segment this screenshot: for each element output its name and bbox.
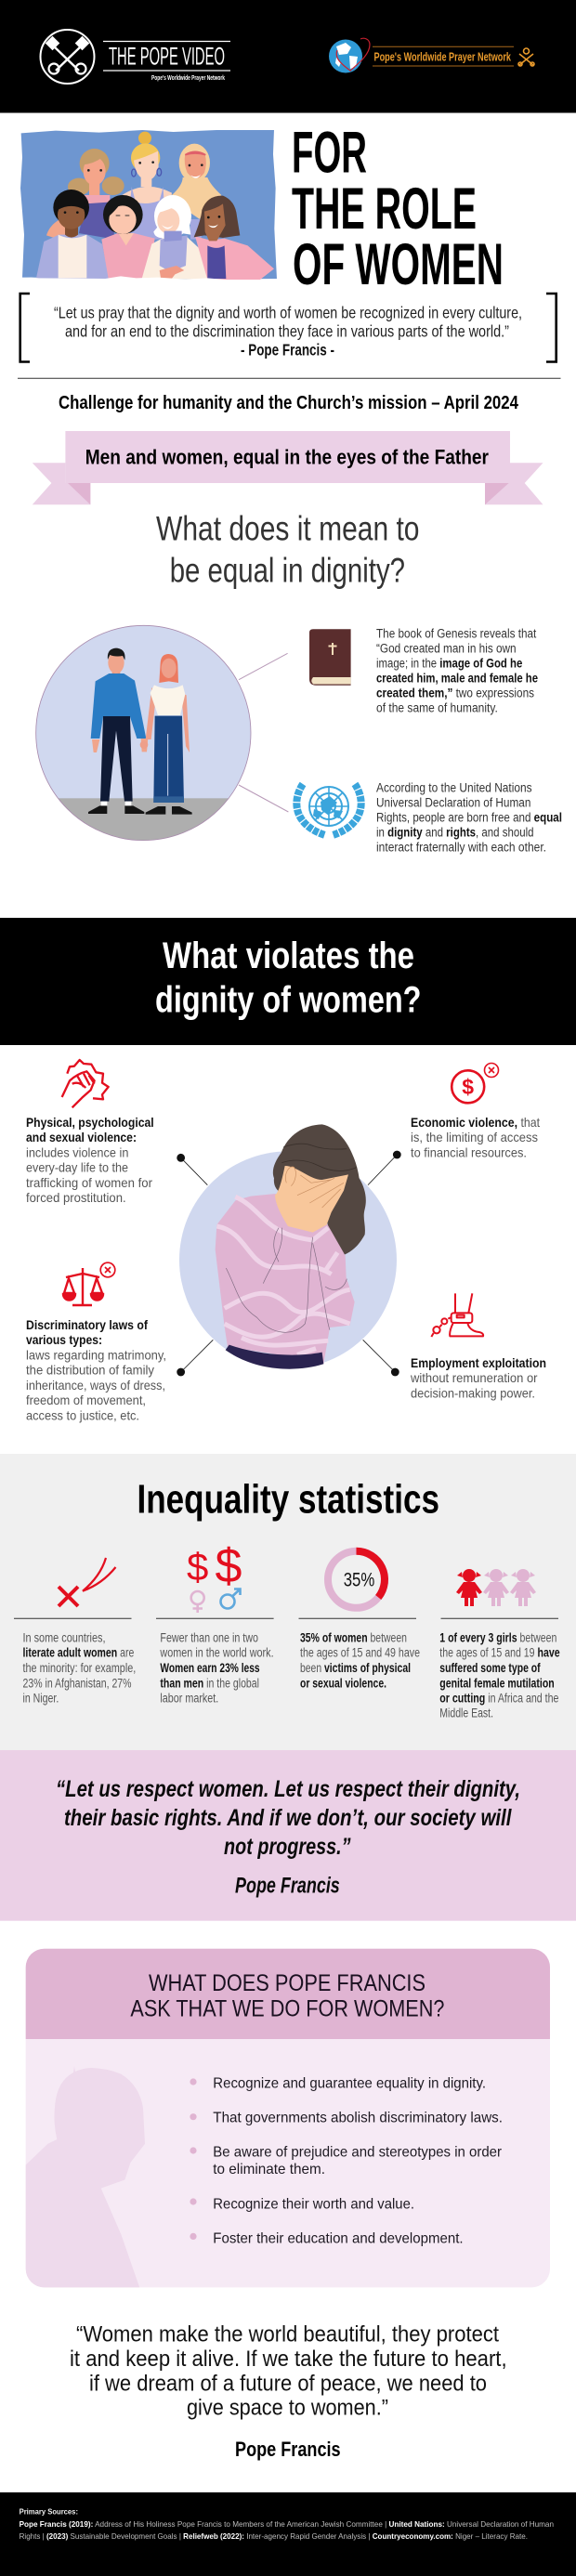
woman with hijab — [172, 144, 221, 240]
panel: pink quote: not progress.” — [224, 1834, 351, 1860]
text: violence rate — [300, 1630, 420, 1690]
text: literacy: in Niger. — [22, 1691, 59, 1705]
text: discriminatory laws: laws regarding matrimony, — [26, 1347, 166, 1362]
icon: United Nations emblem — [296, 784, 361, 835]
text: violence rate: 35% of women between — [300, 1630, 407, 1644]
logo: The Pope Video: Pope's Worldwide Prayer Network — [151, 75, 225, 82]
closing quote: Pope Francis — [235, 2438, 341, 2461]
text: physical violence: forced prostitution. — [26, 1190, 126, 1205]
text: discriminatory laws: the distribution of family — [26, 1362, 154, 1377]
man — [88, 648, 148, 814]
footer: sources — [0, 2492, 576, 2576]
logo: The Pope Video: THE POPE VIDEO — [109, 42, 225, 70]
icon: pay gap: $ — [216, 1539, 242, 1593]
text: employment exploitation: without remuneration or — [410, 1370, 538, 1385]
text: Genesis: The book of Genesis reveals that — [376, 627, 537, 641]
text: Genesis: created him, male and female he — [376, 671, 538, 685]
text: literacy: 23% in Afghanistan, 27% — [22, 1676, 132, 1690]
text: Genesis: “God created man in his own — [376, 642, 517, 656]
illustration: crying woman in circle — [177, 1124, 400, 1376]
text: pay gap: women in the world work. — [160, 1646, 274, 1660]
icon: dollar crossed — [452, 1063, 498, 1103]
text: physical violence: every-day life to the — [26, 1160, 128, 1175]
text: economic violence: Economic violence, that — [411, 1115, 540, 1130]
icon: crossed keys — [41, 30, 95, 84]
bullet list: Recognize their worth and value. — [213, 2196, 414, 2212]
text: United Nations: Rights, people are born free and equal — [376, 811, 562, 825]
text: discriminatory laws: freedom of movement, — [26, 1393, 146, 1407]
text: violence rate: or sexual violence. — [300, 1676, 386, 1690]
text: discriminatory laws: various types: — [26, 1332, 102, 1347]
black band: what violates — [0, 918, 576, 1045]
bullets — [190, 2078, 197, 2240]
text: pay gap: Fewer than one in two — [160, 1630, 258, 1644]
connectors — [239, 653, 288, 812]
text: Genesis: image; in the image of God he — [376, 657, 523, 671]
title: FOR — [292, 121, 367, 186]
closing quote: it and keep it alive. If we take the future to heart, — [70, 2347, 507, 2372]
text: physical violence: includes violence in — [26, 1144, 128, 1159]
woman with pigtails — [46, 149, 124, 240]
woman with blond bun — [121, 132, 172, 240]
prayer quote with brackets: - Pope Francis - — [241, 340, 334, 359]
icon: globe and heart — [329, 38, 370, 72]
silhouette of Pope Francis — [26, 2066, 145, 2287]
text: violence rate: been victims of physical — [300, 1661, 411, 1675]
heading: Inequality statistics — [137, 1476, 439, 1522]
woman with brown hair — [194, 196, 274, 280]
footer: sources: Primary Sources: — [20, 2508, 78, 2517]
text: pay gap: than men in the global — [160, 1676, 259, 1690]
woman with white hair — [142, 195, 208, 281]
bullet list: Be aware of prejudice and stereotypes in order — [213, 2144, 503, 2161]
text: literacy: literate adult women are — [22, 1646, 134, 1660]
ribbon banner — [33, 431, 543, 504]
prayer quote with brackets — [20, 294, 556, 362]
text: United Nations: According to the United Nations — [376, 781, 532, 795]
pointer lines — [177, 1151, 400, 1376]
logo: Pope's Worldwide Prayer Network — [329, 38, 534, 72]
text: girls: or cutting in Africa and the — [439, 1691, 558, 1705]
text: employment exploitation: Employment exploitation — [411, 1355, 546, 1370]
text: girls: 1 of every 3 girls between — [439, 1630, 556, 1644]
text: girls: Middle East. — [439, 1706, 493, 1720]
text: United Nations — [376, 781, 562, 855]
icon: pay gap — [187, 1539, 242, 1613]
heading: equal in dignity — [156, 510, 420, 590]
panel: pink quote — [0, 1750, 576, 1921]
icon: fist — [62, 1060, 109, 1107]
text: discriminatory laws: Discriminatory laws of — [26, 1317, 148, 1332]
text: physical violence — [26, 1115, 154, 1205]
bullet list: Recognize and guarantee equality in dignity. — [213, 2075, 486, 2091]
woman — [140, 654, 192, 815]
text: literacy — [22, 1630, 136, 1705]
icon: bible — [309, 629, 351, 686]
icon: shackled foot — [431, 1293, 483, 1337]
donut chart: 35% — [328, 1551, 385, 1608]
text: United Nations: in dignity and rights, and should — [376, 826, 533, 840]
hair — [273, 1124, 366, 1255]
bullet list — [213, 2075, 503, 2247]
bullet list: to eliminate them. — [213, 2162, 325, 2177]
closing quote: if we dream of a future of peace, we need to — [89, 2371, 487, 2396]
panel: pink quote: Pope Francis — [235, 1874, 340, 1899]
heading: equal in dignity: What does it mean to — [156, 510, 420, 548]
card heading: ASK THAT WE DO FOR WOMEN? — [130, 1995, 444, 2021]
logo: Pope's Worldwide Prayer Network: Pope's Worldwide Prayer Network — [373, 50, 512, 64]
text: literacy: the minority: for example, — [22, 1661, 136, 1675]
title — [292, 121, 504, 297]
bullet list: That governments abolish discriminatory laws. — [213, 2111, 503, 2126]
footer: sources: Pope Francis (2019): Address of His Holiness Pope Francis to Members of the American Jewish Committee | United Nations: Universal Declaration of Human — [20, 2520, 554, 2529]
icon: crossed out pen — [59, 1558, 115, 1606]
text: economic violence — [411, 1115, 540, 1159]
heading: equal in dignity: be equal in dignity? — [170, 552, 405, 590]
text: discriminatory laws: access to justice, etc. — [26, 1407, 139, 1422]
footer: sources: Rights | (2023) Sustainable Development Goals | Reliefweb (2022): Inter-agency Rapid Gender Analysis | Countryeconomy.com: Niger – Literacy Rate. — [20, 2532, 528, 2541]
black band: what violates: What violates the — [163, 935, 414, 976]
text: United Nations: Universal Declaration of Human — [376, 796, 530, 810]
card heading — [130, 1970, 444, 2021]
illustration: man and woman in circle — [28, 625, 257, 844]
icon: three girls — [456, 1569, 536, 1606]
text: discriminatory laws: inheritance, ways of dress, — [26, 1378, 165, 1393]
card: what does Pope Francis ask — [26, 1949, 550, 2287]
text: violence rate: the ages of 15 and 49 have — [300, 1646, 420, 1660]
logo: The Pope Video — [41, 30, 230, 84]
text: Genesis — [376, 627, 538, 714]
woman with black bob — [101, 195, 155, 279]
text: physical violence: trafficking of women for — [26, 1175, 152, 1190]
text: physical violence: Physical, psychological — [26, 1115, 154, 1130]
icon: keys emblem — [518, 48, 534, 66]
text: employment exploitation — [410, 1355, 546, 1401]
text: pay gap: Women earn 23% less — [160, 1661, 260, 1675]
text: employment exploitation: decision-making power. — [411, 1386, 535, 1401]
text: pay gap — [160, 1630, 274, 1705]
black band: what violates: dignity of women? — [155, 979, 422, 1020]
donut chart: 35%: 35% — [344, 1569, 374, 1590]
icon: pay gap: $ — [187, 1545, 208, 1589]
closing quote — [70, 2322, 507, 2461]
text: discriminatory laws — [26, 1317, 166, 1422]
closing quote: give space to women.” — [187, 2396, 388, 2421]
hero illustration: group of seven women — [19, 130, 279, 284]
text: economic violence: to financial resources. — [411, 1144, 527, 1159]
panel: inequality statistics — [0, 1454, 576, 1750]
text: Genesis: of the same of humanity. — [376, 700, 498, 714]
text: economic violence: is, the limiting of access — [411, 1130, 538, 1144]
sweater — [216, 1194, 355, 1364]
text: Genesis: created them,” two expressions — [376, 686, 534, 700]
text: physical violence: and sexual violence: — [26, 1130, 137, 1144]
header band — [0, 0, 576, 113]
text: girls: the ages of 15 and 19 have — [439, 1646, 560, 1660]
woman with short black hair — [36, 190, 109, 279]
text: United Nations: interact fraternally with each other. — [376, 841, 546, 855]
closing quote: “Women make the world beautiful, they protect — [76, 2322, 499, 2347]
text: girls: suffered some type of — [439, 1661, 541, 1675]
text: pay gap: labor market. — [160, 1691, 218, 1705]
icon: scales crossed — [63, 1262, 115, 1305]
ribbon banner: Men and women, equal in the eyes of the Father — [85, 445, 489, 468]
face and hand — [275, 1166, 348, 1233]
icon: dollar crossed: $ — [462, 1075, 474, 1099]
bullet list: Foster their education and development. — [213, 2231, 464, 2247]
card heading: WHAT DOES POPE FRANCIS — [149, 1970, 425, 1996]
text: literacy: In some countries, — [22, 1630, 106, 1644]
trousers — [226, 1345, 323, 1369]
text: girls — [439, 1630, 560, 1720]
